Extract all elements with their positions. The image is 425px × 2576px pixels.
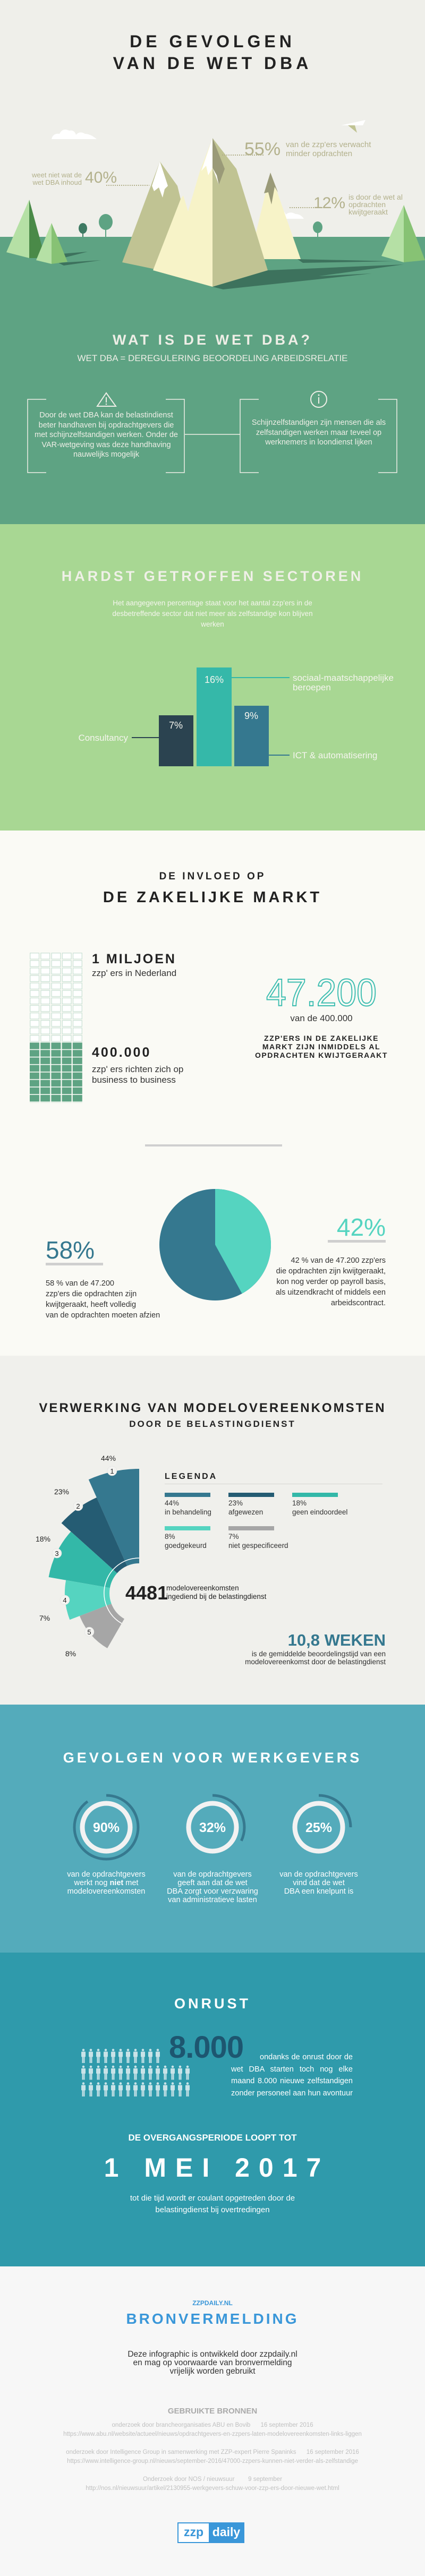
stat: 58%: 58%: [46, 1236, 95, 1264]
text: is door de wet al: [348, 193, 403, 201]
icon: trees: [6, 200, 425, 264]
stat: 58%: zzp'ers die opdrachten zijn: [46, 1290, 137, 1298]
stat: 47.200: van de 400.000: [290, 1013, 353, 1023]
text: 40%: [85, 169, 117, 186]
fan chart: 8%: [65, 1649, 76, 1658]
title: VAN DE WET DBA: [113, 54, 312, 73]
text: credit: en mag op voorwaarde van bronvermelding: [133, 2358, 292, 2367]
stat: 47.200: MARKT ZIJN INMIDDELS AL: [262, 1042, 380, 1051]
fan chart: 44%: [101, 1454, 116, 1462]
stat: 58%: 58 % van de 47.200: [46, 1279, 114, 1288]
text: 12%: [313, 194, 345, 212]
bar chart: beroepen: [293, 682, 331, 692]
text: credit: [128, 2350, 298, 2376]
text: overgangsperiode: DE OVERGANGSPERIODE LOOPT TOT: [128, 2133, 297, 2143]
donut charts: [73, 1794, 352, 1861]
text: credit: Deze infographic is ontwikkeld door zzpdaily.nl: [128, 2350, 298, 2359]
mountain: left: [122, 161, 191, 273]
stat: 12%: [313, 193, 403, 216]
text: left box: Door de wet DBA kan de belastindienst beter handhaven bij opdrachtgevers die met schijnzelfstandigen werken. Onder de VAR-wetgeving was deze handhaving nauwelijks mogelijk: [35, 411, 178, 459]
stat: 55%: [244, 139, 371, 159]
legend: 8%: [165, 1533, 175, 1541]
chart: unit grid 1 miljoen vs 400.000: [30, 953, 82, 1102]
logo: zzp daily: [177, 2522, 244, 2543]
stat: 400.000: 400.000: [92, 1045, 151, 1060]
divider: [145, 1144, 282, 1146]
sources: onderzoek door Intelligence Group in samenwerking met ZZP-expert Pierre Spaninks 16 september 2016: [66, 2449, 359, 2455]
fan chart: 4: [63, 1596, 67, 1604]
legend: 18%: [292, 1499, 307, 1507]
text: opdrachten: [348, 200, 386, 209]
icon: clouds: [52, 130, 304, 219]
stat: 1 miljoen: 1 MILJOEN: [92, 952, 176, 966]
stat: 42%: 42%: [337, 1213, 386, 1241]
text: werkgevers stats: [67, 1870, 146, 1896]
stat: 47.200: OPDRACHTEN KWIJTGERAAKT: [255, 1051, 388, 1059]
mountain: main: [153, 138, 268, 287]
stat: 42%: 42 % van de 47.200 zzp'ers: [291, 1256, 386, 1265]
icon: warning: [97, 393, 116, 406]
date: 1 mei 2017: 1 MEI 2017: [104, 2153, 330, 2183]
heading: verwerking van modelovereenkomsten: VERWERKING VAN MODELOVEREENKOMSTEN: [39, 1401, 386, 1415]
mountain: right: [250, 173, 301, 259]
sources: https://www.intelligence-group.nl/nieuws/september-2016/47000-zzpers-kunnen-niet-verder-als-zelfstandige: [67, 2458, 358, 2464]
bar chart: sociaal-maatschappelijke: [293, 673, 394, 683]
panel: definitions with brackets: [27, 391, 397, 473]
fan chart: 7%: [39, 1614, 50, 1622]
fan chart: 5: [87, 1628, 91, 1636]
stat: 58%: kwijtgeraakt, heeft volledig: [46, 1300, 136, 1309]
stat: 400.000: business to business: [92, 1075, 176, 1085]
description: Het aangegeven percentage staat voor het aantal zzp'ers in de desbetreffende sector dat niet meer als zelfstandige kon blijven werken: [112, 599, 313, 628]
title: [113, 32, 312, 73]
sources: [63, 2407, 362, 2492]
stat: 42%: als uitzendkracht of middels een: [276, 1288, 386, 1297]
legend: 7%: [228, 1533, 239, 1541]
text: coulant: belastingdienst bij overtredingen: [155, 2205, 270, 2214]
text: DOOR DE BELASTINGDIENST: [129, 1419, 296, 1429]
logo: zzp daily: daily: [212, 2525, 240, 2539]
heading: gevolgen voor werkgevers: GEVOLGEN VOOR WERKGEVERS: [63, 1750, 362, 1766]
stat: 10,8 weken: modelovereenkomst door de belastingdienst: [245, 1658, 386, 1666]
logo: zzp daily: zzp: [184, 2525, 203, 2539]
text: DE ZAKELIJKE MARKT: [103, 889, 322, 906]
dotted leaders: [106, 155, 332, 208]
sources: onderzoek door brancheorganisaties ABU en Bovib 16 september 2016: [112, 2422, 313, 2428]
sources: Onderzoek door NOS / nieuwsuur 9 september: [143, 2476, 282, 2483]
stat: 40%: [32, 169, 117, 186]
text: werkgevers stats: van de opdrachtgevers: [67, 1870, 146, 1879]
icon: people grid: [81, 2049, 190, 2096]
heading: bronvermelding: ZZPDAILY.NL: [192, 2299, 233, 2307]
stat: 42%: die opdrachten zijn kwijtgeraakt,: [276, 1267, 386, 1276]
donut charts: 32%: [199, 1820, 226, 1835]
text: geeft aan dat de wet: [177, 1879, 248, 1887]
stat: 42%: kon nog verder op payroll basis,: [276, 1278, 386, 1286]
legend: 44%: [165, 1499, 179, 1507]
sources: http://nos.nl/nieuwsuur/artikel/2130955-werkgevers-schuw-voor-zzp-ers-door-nieuwe-wet.html: [86, 2485, 339, 2492]
pie chart: [159, 1189, 271, 1300]
legend: 23%: [228, 1499, 243, 1507]
bar chart: 16%: [205, 674, 224, 685]
subtitle: WET DBA = DEREGULERING BEOORDELING ARBEIDSRELATIE: [77, 353, 348, 363]
stat: 47.200: [255, 972, 388, 1059]
text: right box: Schijnzelfstandigen zijn mensen die als zelfstandigen werken maar teveel op werknemers in loondienst lijken: [252, 418, 386, 447]
text: DBA een knelpunt is: [284, 1887, 353, 1896]
legend: niet gespecificeerd: [228, 1542, 288, 1550]
legend: afgewezen: [228, 1508, 263, 1516]
text: van de opdrachtgevers: [173, 1870, 252, 1879]
heading: hardst getroffen sectoren: HARDST GETROFFEN SECTOREN: [62, 568, 363, 584]
legend: LEGENDA: [165, 1472, 217, 1481]
fan chart: 3: [55, 1550, 59, 1557]
stat: 400.000: [92, 1045, 183, 1085]
text: 4481: [125, 1582, 168, 1604]
sources: GEBRUIKTE BRONNEN: [168, 2407, 257, 2416]
stat: 10,8 weken: 10,8 WEKEN: [288, 1631, 386, 1649]
bar chart: Consultancy: [78, 733, 128, 743]
text: wet DBA inhoud: [32, 178, 82, 186]
text: BRONVERMELDING: [126, 2310, 299, 2327]
fan chart: 23%: [54, 1487, 69, 1496]
fan chart: 2: [76, 1502, 80, 1510]
text: ingediend bij de belastingdienst: [166, 1593, 266, 1601]
stat: 10,8 weken: [245, 1631, 386, 1666]
icon: info: [311, 391, 327, 407]
stat: 10,8 weken: is de gemiddelde beoordelingstijd van een: [252, 1650, 386, 1658]
legend: goedgekeurd: [165, 1542, 207, 1550]
bar chart: 9%: [244, 711, 258, 721]
bar chart: ICT & automatisering: [293, 750, 377, 760]
text: werkgevers stats: werkt nog niet met: [74, 1879, 138, 1887]
bar chart: [78, 667, 394, 766]
fan chart: 18%: [36, 1535, 50, 1543]
donut charts: 25%: [305, 1820, 332, 1835]
legend: geen eindoordeel: [292, 1508, 347, 1516]
header landscape illustration: [6, 120, 425, 289]
legend: in behandeling: [165, 1508, 211, 1516]
text: 8.000 description: ondanks de onrust door de wet DBA starten toch nog elke maand 8.000 nieuwe zelfstandigen zonder personeel aan hun avontuur: [231, 2053, 353, 2098]
heading: wat is de wet DBA: WAT IS DE WET DBA?: [113, 332, 312, 348]
fan chart: [36, 1454, 139, 1658]
donut charts: 90%: [93, 1820, 120, 1835]
sources: https://www.abu.nl/website/actueel/nieuws/opdrachtgevers-en-zzpers-laten-modelovereenkomsten-links-liggen: [63, 2431, 362, 2437]
heading: onrust: ONRUST: [174, 1996, 251, 2012]
bar chart: 7%: [169, 720, 183, 731]
stat: 58%: van de opdrachten moeten afzien: [46, 1311, 160, 1320]
stat: 400.000: zzp' ers richten zich op: [92, 1064, 183, 1074]
stat: 47.200: ZZP'ERS IN DE ZAKELIJKE: [264, 1034, 379, 1042]
text: van de zzp'ers verwacht: [286, 140, 371, 149]
stat: 8.000: 8.000: [169, 2030, 243, 2065]
text: coulant: [130, 2194, 295, 2214]
fan chart: 1: [110, 1467, 114, 1475]
text: DBA zorgt voor verzwaring: [167, 1887, 258, 1896]
text: coulant: tot die tijd wordt er coulant opgetreden door de: [130, 2194, 295, 2203]
stat: 1 miljoen: [92, 952, 176, 978]
text: minder opdrachten: [286, 149, 352, 158]
text: van administratieve lasten: [168, 1896, 257, 1904]
text: modelovereenkomsten: [166, 1584, 239, 1592]
icon: plane: [341, 120, 366, 133]
text: kwijtgeraakt: [348, 208, 388, 216]
stat: 42%: arbeidscontract.: [331, 1299, 386, 1307]
text: van de opdrachtgevers: [279, 1870, 358, 1879]
text: 55%: [244, 139, 280, 159]
text: vind dat de wet: [293, 1879, 345, 1887]
text: credit: vrijelijk worden gebruikt: [169, 2367, 256, 2376]
heading: de invloed op de zakelijke markt: DE INVLOED OP: [159, 871, 266, 882]
stat: 58%: [46, 1236, 160, 1320]
title: DE GEVOLGEN: [130, 32, 295, 51]
stat: 4481: [125, 1582, 267, 1604]
shadows: [48, 252, 404, 289]
stat: 42%: [276, 1213, 386, 1307]
legend: [165, 1472, 382, 1550]
text: weet niet wat de: [32, 171, 82, 179]
stat: 1 miljoen: zzp' ers in Nederland: [92, 968, 176, 978]
text: werkgevers stats: modelovereenkomsten: [67, 1887, 145, 1896]
